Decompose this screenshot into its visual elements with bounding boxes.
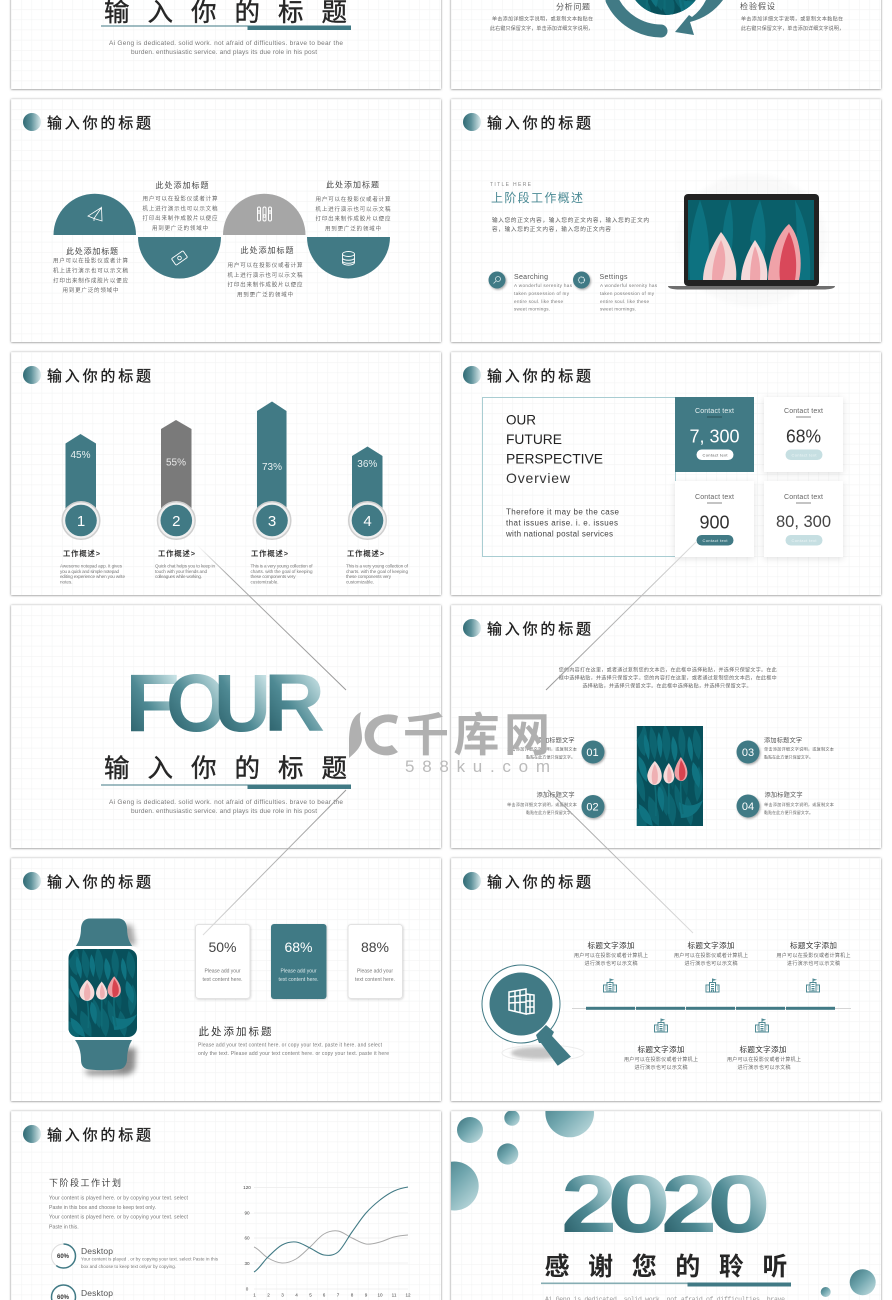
description 2: touch with your friends and	[155, 569, 207, 574]
description 3: customizable.	[250, 580, 279, 584]
point 01: 黏贴在此方便只保留文字。	[526, 754, 575, 760]
text block 3: 此处添加标题	[240, 245, 294, 255]
panel: work plan with chart	[11, 1111, 441, 1300]
bar 1: 1	[77, 513, 85, 530]
overview text: TITLE HERE	[490, 182, 532, 188]
ring 60% second	[52, 1285, 113, 1300]
big word FOUR: O	[166, 658, 227, 749]
stat card 88%: 88%	[361, 939, 389, 955]
line chart: 4	[295, 1292, 298, 1298]
description 1: Awesome notepad app. It gives	[60, 564, 123, 568]
overview text	[490, 182, 649, 233]
text block 4	[316, 180, 391, 232]
milestone 4: 用户可以在投影仪或者计算机上	[624, 1056, 698, 1063]
ring 60% second: Desktop	[81, 1288, 113, 1298]
description 3	[250, 549, 313, 584]
stat card 50%: Please add your	[204, 968, 241, 974]
perspective text: PERSPECTIVE	[506, 450, 603, 466]
point 04: 04	[742, 801, 754, 813]
searching text	[514, 274, 573, 312]
card: 7,300: Contact text	[695, 408, 734, 415]
point 01: 添加标题文字	[536, 736, 574, 744]
header icon	[23, 113, 41, 131]
right text: hypothesis: 检验假设	[740, 1, 775, 11]
line chart: 10	[377, 1292, 383, 1298]
milestone 1: 进行演示也可以示文稿	[584, 960, 638, 967]
card: 900: 900	[699, 512, 730, 532]
perspective text: Therefore it may be the case	[506, 508, 620, 516]
card: 80,300: Contact text	[792, 538, 817, 543]
right text: hypothesis: 此右键只保留文字，单击添加详细文字说明，	[741, 25, 844, 32]
header icon	[463, 872, 481, 890]
milestone 5: 用户可以在投影仪或者计算机上	[727, 1056, 801, 1063]
overview text: 输入您的正文内容，输入您的正文内容，输入您的正文内	[492, 216, 649, 224]
searching text: taken possession of my	[514, 291, 570, 296]
description 4: these components very	[346, 574, 392, 579]
line chart: 2	[267, 1292, 270, 1298]
tulip photo	[636, 722, 703, 826]
text block 3: 机上进行演示也可以示文稿	[228, 271, 303, 279]
card: 900: Contact text	[702, 538, 728, 543]
point 03: 添加标题文字	[764, 736, 802, 744]
big word FOUR: R	[264, 658, 325, 749]
settings text	[600, 274, 658, 312]
subtitle text	[109, 40, 343, 56]
stat card 68%: text content here.	[278, 977, 318, 983]
decorative gradient circles	[451, 1111, 876, 1297]
icon: search	[488, 272, 506, 288]
semicircle 4 with database icon	[307, 237, 390, 278]
panel: 2020 thank you slide	[450, 1110, 882, 1300]
milestone 5: 标题文字添加	[740, 1044, 786, 1054]
perspective text	[505, 412, 620, 538]
milestone 4: 进行演示也可以示文稿	[634, 1064, 688, 1071]
line chart: 8	[351, 1292, 354, 1298]
laptop	[668, 174, 835, 306]
smartwatch	[65, 918, 142, 1075]
point 02: 黏贴在此方便只保留文字。	[526, 809, 575, 815]
milestone 1: 用户可以在投影仪或者计算机上	[574, 952, 648, 959]
description 1: 工作概述>	[63, 549, 100, 558]
left text: analysis: 分析问题	[556, 2, 590, 12]
intro paragraph: 选择粘贴，并选择只保留文字。在此框中选择粘贴，并选择只保留文字。	[582, 682, 752, 690]
bar 2: 55%	[166, 458, 186, 468]
settings text: taken possession of my	[600, 291, 655, 296]
header title: 输入你的标题	[47, 874, 151, 891]
stat card 88%: Please add your	[357, 968, 393, 974]
point 04	[736, 791, 835, 818]
plan text: Your content is played here. or by copying your text. select	[49, 1196, 189, 1202]
line chart: 11	[392, 1292, 397, 1298]
description 3: 工作概述>	[251, 549, 288, 558]
overview text: 容，输入您的正文内容，输入您的正文内容	[492, 225, 611, 233]
panel: top-left title slide	[11, 0, 441, 89]
panel: top-right cycle	[451, 0, 881, 89]
magnifier	[482, 965, 584, 1066]
header icon	[23, 872, 41, 890]
line chart: 3	[281, 1292, 284, 1298]
milestone 1	[574, 940, 648, 992]
milestone 3: 标题文字添加	[790, 940, 837, 950]
frame	[482, 398, 676, 556]
text block 1: 此处添加标题	[66, 246, 118, 256]
panel: semicircles	[11, 99, 441, 342]
big year 2020: 0	[707, 1159, 771, 1250]
plan text: Paste in this box and choose to keep text only.	[49, 1205, 156, 1211]
description 2: Quick chat helps you to keep in	[155, 564, 215, 568]
description 2	[155, 549, 215, 579]
right text: hypothesis: 单击添加详细文字说明，或复制文本黏贴在	[741, 16, 843, 22]
milestone 3: 进行演示也可以示文稿	[787, 960, 840, 967]
perspective text: that issues arise. i. e. issues	[506, 518, 618, 528]
bar 3: 3	[268, 513, 276, 530]
panel: percent bars	[11, 352, 441, 595]
text block 3: 打印出来制作成胶片以便应	[228, 280, 303, 288]
big year 2020: 0	[607, 1159, 671, 1250]
stat card 50%: 50%	[208, 939, 237, 955]
line chart: 30	[244, 1261, 250, 1266]
header title: 输入你的标题	[487, 621, 591, 638]
watch text: only the text. Please add your text content here. or copy your text. paste it here	[198, 1051, 389, 1057]
left text: analysis	[490, 2, 593, 32]
milestone 5	[727, 1019, 801, 1071]
ring 60% with desktop text: box and choose to keep text onlyor by copying.	[81, 1264, 176, 1269]
bar 2	[158, 420, 195, 539]
header icon	[23, 1125, 41, 1143]
card: 68%: Contact text	[792, 452, 817, 458]
description 4: customizable.	[346, 580, 374, 584]
subtitle text	[109, 799, 343, 815]
settings text: sweet mornings.	[600, 306, 636, 312]
subtitle text: Ai Geng is dedicated. solid work. not afraid of difficulties. brave to bear the	[109, 40, 343, 47]
text block 4: 此处添加标题	[326, 180, 379, 190]
stat card 68%	[271, 924, 326, 999]
card: 68%: 68%	[786, 426, 821, 446]
description 2: 工作概述>	[158, 549, 195, 558]
header icon	[463, 619, 481, 637]
description 4: charts. with the goal of keeping	[346, 569, 408, 574]
searching text: entire soul. like these	[514, 299, 563, 304]
point 02: 单击添加详细文字说明，或复制文本	[507, 801, 578, 808]
panel: FOUR section slide	[11, 605, 441, 848]
plan text	[49, 1177, 189, 1230]
point 03: 单击添加详细文字说明，或复制文本	[764, 746, 835, 752]
panel: four numbered points	[451, 605, 881, 848]
point 01: 01	[586, 747, 599, 759]
icon: settings	[573, 272, 590, 288]
panel: smartwatch	[11, 858, 441, 1101]
description 4: This is a very young collection of	[346, 564, 409, 568]
subtitle text: burden. enthusiastic service. and plays its due role in his post	[131, 808, 317, 815]
point 03: 黏贴在此方便只保留文字。	[764, 754, 813, 760]
point 04: 黏贴在此方便只保留文字。	[764, 809, 813, 815]
point 02: 添加标题文字	[536, 791, 574, 799]
milestone 3	[776, 940, 850, 992]
panel: perspective cards	[451, 352, 881, 595]
thanks title: 感谢您的聆听	[544, 1252, 788, 1281]
line chart: 60	[244, 1236, 250, 1240]
milestone 2: 用户可以在投影仪或者计算机上	[674, 952, 748, 959]
watch text: Please add your text content here. or copy your text. paste it here. and select	[198, 1042, 383, 1048]
big year 2020	[561, 1159, 771, 1250]
title: 输入你的标题	[104, 755, 347, 783]
card: 900	[675, 481, 754, 557]
header title: 输入你的标题	[487, 874, 591, 891]
header icon	[23, 366, 41, 384]
watermark logo and text: 588ku.com	[405, 757, 550, 776]
description 3: This is a very young collection of	[250, 564, 313, 568]
right text: hypothesis	[740, 1, 844, 32]
title underline	[101, 26, 351, 30]
ring 60% with desktop text: 60%	[57, 1254, 70, 1260]
bar 3	[253, 402, 291, 539]
stat card 68%: 68%	[284, 939, 313, 955]
point 03: 03	[742, 747, 754, 759]
cycle graphic	[612, 0, 723, 35]
panel: laptop overview	[451, 99, 881, 342]
settings text: A wonderful serenity has	[600, 283, 658, 288]
description 1: notes.	[60, 580, 73, 584]
text block 1	[53, 246, 128, 294]
left text: analysis: 此右键只保留文字，单击添加详细文字说明，	[490, 25, 593, 32]
line chart: 0	[246, 1286, 249, 1292]
perspective text: Overview	[506, 470, 571, 486]
description 3: these components very	[250, 574, 296, 579]
left text: analysis: 单击添加详细文字说明，或复制文本黏贴在	[492, 16, 593, 22]
stat card 68%: Please add your	[280, 968, 317, 974]
text block 2: 用到更广泛的领域中	[152, 224, 208, 232]
stat card 50%	[196, 924, 250, 998]
bar 3: 73%	[262, 462, 282, 473]
line chart: 6	[323, 1292, 326, 1298]
card: 7,300: Contact text	[702, 452, 728, 458]
big year 2020: 2	[561, 1159, 617, 1250]
text block 1: 机上进行演示也可以示文稿	[53, 266, 128, 274]
stat card 50%: text content here.	[202, 977, 242, 983]
header title: 输入你的标题	[47, 1127, 151, 1144]
header title: 输入你的标题	[47, 115, 151, 132]
header title: 输入你的标题	[487, 115, 591, 132]
stat card 88%: text content here.	[355, 977, 395, 983]
big word FOUR: U	[214, 658, 271, 749]
milestone 2: 进行演示也可以示文稿	[684, 960, 738, 967]
point 01: 单击添加详细文字说明，或复制文本	[507, 746, 578, 752]
text block 2: 机上进行演示也可以示文稿	[142, 204, 218, 212]
text block 3: 用到更广泛的领域中	[237, 290, 293, 298]
text block 2	[142, 180, 218, 232]
text block 4: 用到更广泛的领域中	[325, 224, 381, 232]
semicircle 2 with money icon	[138, 237, 221, 278]
point 01	[507, 736, 604, 764]
line chart: 1	[253, 1292, 256, 1298]
point 04: 添加标题文字	[764, 791, 802, 799]
milestone 5: 进行演示也可以示文稿	[738, 1064, 790, 1071]
watermark logo and text: 千库网	[403, 709, 550, 761]
point 04: 单击添加详细文字说明，或复制文本	[764, 801, 835, 808]
description 1: you a quick and simple notepad	[60, 569, 119, 574]
card: 80,300	[764, 481, 843, 557]
card: 68%: Contact text	[784, 408, 823, 415]
bar 4: 4	[363, 513, 372, 530]
timeline	[572, 1007, 851, 1010]
overview text: 上阶段工作概述	[491, 190, 583, 205]
text block 1: 打印出来制作成胶片以便应	[53, 276, 128, 284]
plan text: Your content is played here. or by copying your text. select	[49, 1214, 189, 1220]
subtitle text: Ai Geng is dedicated. solid work. not afraid of difficulties. brave to bear the	[109, 799, 343, 806]
thanks underline	[541, 1282, 791, 1286]
card: 7,300	[675, 397, 754, 472]
bar 1: 45%	[70, 450, 91, 461]
milestone 2: 标题文字添加	[688, 940, 734, 950]
text block 3	[228, 245, 303, 298]
line chart: 120	[243, 1185, 251, 1190]
milestone 2	[674, 940, 748, 992]
point 02: 02	[586, 802, 599, 814]
semicircle 1 with plane icon	[54, 194, 136, 235]
milestone 4	[624, 1019, 698, 1071]
intro paragraph: 您的内容打在这里，或者通过复制您的文本后，在此框中选择粘贴，并选择只保留文字。在此	[559, 666, 777, 674]
header icon	[463, 113, 481, 131]
plan text: Paste in this.	[49, 1224, 79, 1230]
ring 60% with desktop text: Your content is played . or by copying your text. select Paste in this	[81, 1256, 219, 1262]
ring 60% with desktop text	[52, 1244, 219, 1269]
description 2: colleagues while working.	[155, 574, 202, 579]
semicircle 3 with sliders icon	[223, 194, 306, 235]
intro paragraph	[559, 666, 777, 690]
line chart: 9	[365, 1292, 368, 1298]
bar 4	[349, 446, 386, 539]
settings text: entire soul. like these	[600, 299, 649, 304]
description 4: 工作概述>	[347, 549, 384, 558]
description 1	[60, 549, 125, 584]
searching text: sweet mornings.	[514, 306, 550, 312]
milestone 3: 用户可以在投影仪或者计算机上	[776, 952, 850, 959]
point 02	[507, 791, 604, 818]
text block 3: 用户可以在投影仪或者计算	[228, 261, 303, 269]
milestone 1: 标题文字添加	[588, 940, 634, 950]
ring 60% with desktop text: Desktop	[81, 1246, 113, 1256]
big word FOUR: F	[125, 658, 180, 749]
header title: 输入你的标题	[487, 368, 591, 385]
watermark logo and text	[349, 709, 550, 776]
description 3: charts. with the goal of keeping	[250, 569, 313, 574]
searching text: A wonderful serenity has	[514, 283, 573, 288]
watch text: 此处添加标题	[198, 1025, 272, 1038]
text block 2: 打印出来制作成胶片以便应	[142, 214, 218, 222]
text block 1: 用户可以在投影仪或者计算	[53, 256, 128, 264]
watermark lines	[197, 542, 696, 935]
text block 4: 打印出来制作成胶片以便应	[316, 214, 391, 222]
bar 2: 2	[172, 513, 180, 530]
text block 2: 用户可以在投影仪或者计算	[142, 194, 218, 202]
plan text: 下阶段工作计划	[49, 1177, 121, 1188]
text block 4: 用户可以在投影仪或者计算	[316, 195, 391, 203]
watch text	[198, 1025, 389, 1057]
milestone 4: 标题文字添加	[638, 1044, 684, 1054]
subtitle text: burden. enthusiastic service. and plays its due role in his post	[131, 49, 317, 56]
card: 900: Contact text	[695, 494, 734, 501]
header icon	[463, 366, 481, 384]
text block 2: 此处添加标题	[156, 180, 208, 190]
point 03	[736, 736, 835, 764]
text block 1: 用到更广泛的领域中	[62, 286, 118, 294]
line chart	[243, 1185, 411, 1298]
title underline	[101, 784, 351, 789]
line chart: 7	[337, 1292, 340, 1298]
panel: magnifier timeline	[451, 858, 881, 1101]
line chart: 90	[244, 1210, 250, 1216]
intro paragraph: 框中选择粘贴，并选择只保留文字。您的内容打在这里，或者通过复制您的文本后，在此框中	[559, 674, 777, 682]
settings text: Settings	[600, 274, 628, 281]
searching text: Searching	[514, 274, 548, 281]
perspective text: with national postal services	[505, 530, 613, 538]
header title: 输入你的标题	[47, 368, 151, 385]
text block 4: 机上进行演示也可以示文稿	[316, 205, 391, 213]
perspective text: FUTURE	[506, 431, 562, 447]
description 1: editing experience when you write	[60, 574, 125, 579]
card: 7,300: 7, 300	[689, 426, 740, 446]
perspective text: OUR	[506, 412, 536, 428]
description 4	[346, 549, 409, 584]
line chart: 12	[405, 1292, 411, 1298]
card: 68%	[764, 397, 843, 472]
bar 1	[62, 434, 100, 539]
big year 2020: 2	[661, 1159, 717, 1250]
bar 4: 36%	[357, 459, 377, 470]
line chart: 5	[309, 1292, 312, 1298]
stat card 88%	[348, 924, 402, 998]
card: 80,300: Contact text	[784, 494, 823, 501]
big word FOUR	[125, 658, 325, 749]
card: 80,300: 80, 300	[776, 513, 831, 531]
